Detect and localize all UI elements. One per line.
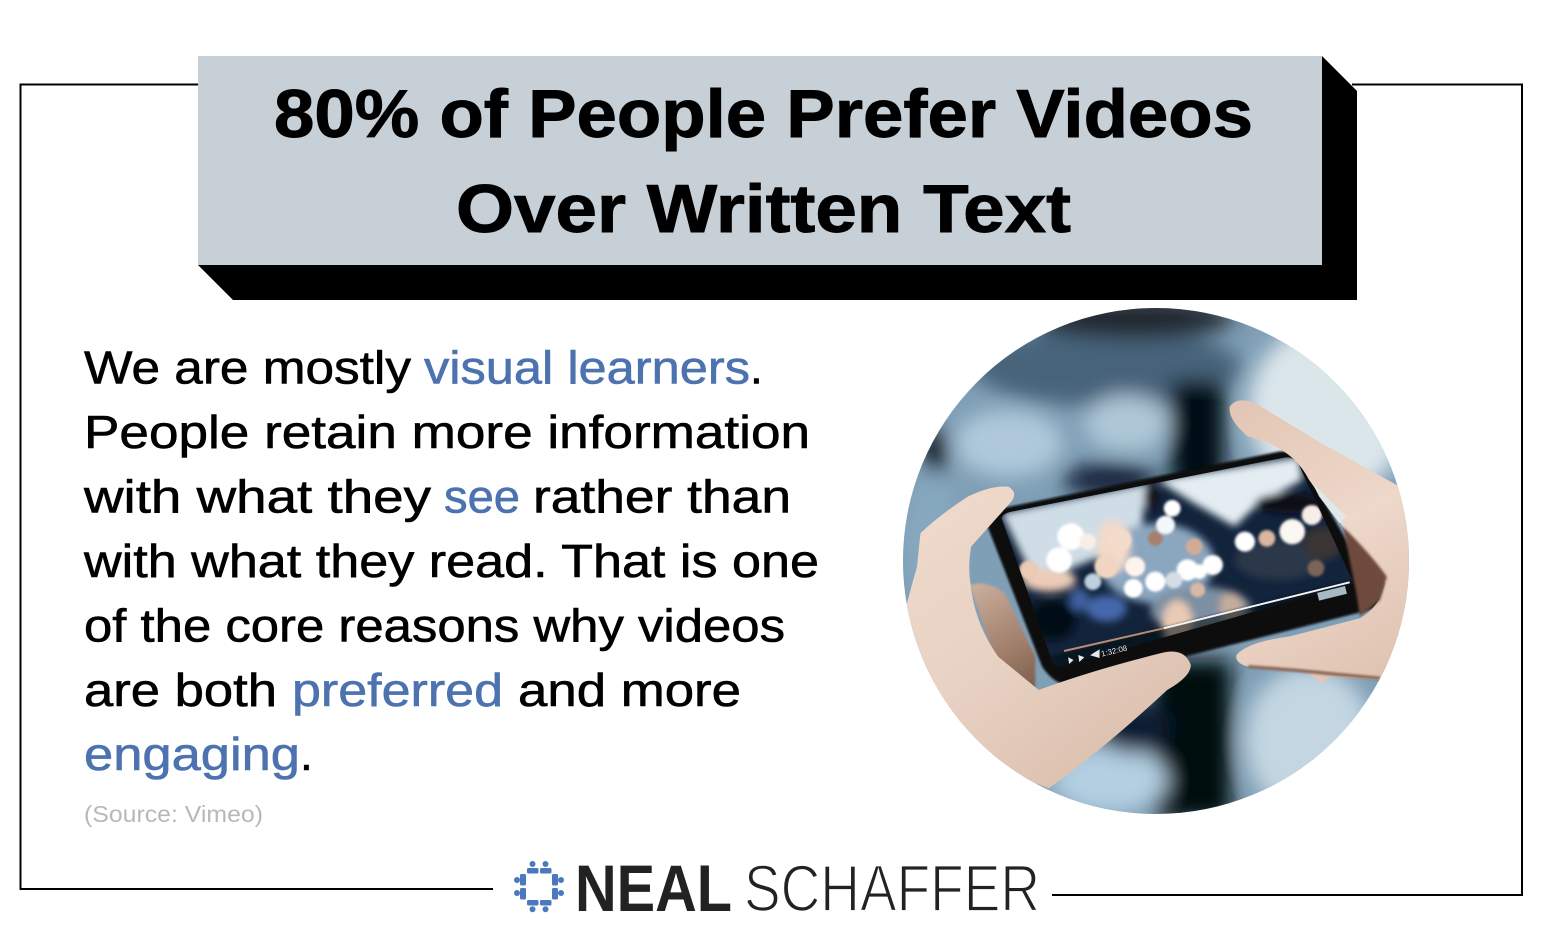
photo: hands holding phone playing video [890,298,1424,820]
source note: (Source: Vimeo) [84,801,263,827]
player controls: 1:32:08 [1100,643,1129,659]
body text: see [444,470,520,522]
player controls [1068,586,1347,664]
title: Over Written Text [456,171,1071,247]
progress bar [1064,628,1164,651]
left fingers behind phone [969,584,1035,690]
logo: Neal Schaffer [514,851,1040,925]
outer frame left [20,84,493,889]
title [274,76,1253,247]
logo wordmark: NEAL [575,851,732,925]
logo icon [514,861,564,912]
body text: . [300,728,313,780]
title: 80% of People Prefer Videos [274,76,1253,152]
body text: visual learners [424,342,750,394]
body text [83,342,819,780]
body text: rather than [533,470,791,522]
body text: preferred [292,664,503,716]
body text: We are mostly [84,342,411,394]
body text: with what they read. That is one [83,535,819,587]
phone body [986,451,1380,685]
title banner [198,56,1357,300]
body text: People retain more information [84,406,810,458]
body text: . [750,342,763,394]
body text: engaging [84,728,300,780]
phone screen [1002,457,1354,666]
right hand [1230,400,1424,687]
body text: and more [518,664,741,716]
body text: of the core reasons why videos [84,600,785,652]
left hand [904,486,1191,788]
logo: Neal Schaffer: SCHAFFER [744,851,1040,925]
body text: with what they [83,470,431,522]
body text: are both [84,664,277,716]
outer frame right [1052,84,1522,895]
bokeh lights [1019,500,1324,598]
